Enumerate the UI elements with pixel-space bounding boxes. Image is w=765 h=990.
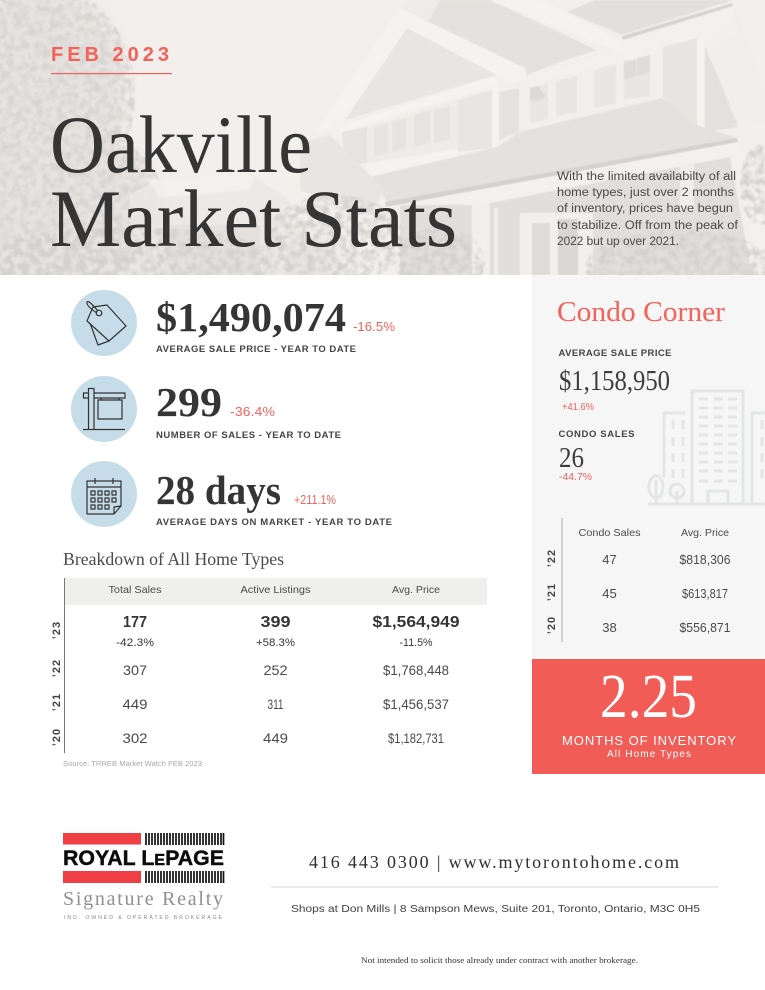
panel: months of inventory: All Home Types [607,749,691,760]
stat: number of sales: 299 [156,379,222,425]
condo history table: Condo Sales [578,527,640,539]
title: Oakville [50,99,312,190]
icon: calendar [71,461,137,527]
heading: breakdown: Breakdown of All Home Types [63,549,284,569]
condo history table: $613,817 [682,586,728,601]
year labels: ’20 [51,728,63,746]
condo average sale price: AVERAGE SALE PRICE [558,348,672,359]
row 2021: 449 [122,696,148,712]
row 2022: 307 [123,662,147,678]
condo sales: -44.7% [559,472,592,483]
icon: for sale sign [71,376,137,442]
table header row: Avg. Price [392,584,440,596]
row 2020 [122,730,444,746]
table header row: Total Sales [108,584,162,596]
heading: condo corner: Condo Corner [557,296,725,328]
year labels: ’22 [51,659,63,677]
condo history table: $818,306 [680,552,730,567]
panel: months of inventory: MONTHS OF INVENTORY [562,733,736,748]
row 2021: $1,456,537 [383,696,449,712]
intro text [557,171,739,248]
table header row [108,584,440,596]
contact line: 416 443 0300 | www.mytorontohome.com [309,852,679,872]
address: Shops at Don Mills | 8 Sampson Mews, Suite 201, Toronto, Ontario, M3C 0H5 [291,904,701,915]
condo sales: CONDO SALES [558,429,634,440]
condo average sale price: $1,158,950 [559,366,670,397]
stat: number of sales: NUMBER OF SALES - YEAR TO DATE [156,430,341,441]
year labels: ’23 [51,621,63,639]
row 2023: $1,564,949 [372,614,460,631]
stat: number of sales [71,376,341,442]
row 2020: 302 [122,730,148,746]
icon: price tags [71,290,137,356]
row 2023: 399 [260,614,291,631]
row 2023: +58.3% [256,637,295,649]
intro text: 2022 but up over 2021. [557,236,679,248]
condo history table: ’20 [546,616,558,634]
stat: days on market: 28 days [156,467,281,513]
intro text: home types, just over 2 months [557,187,734,199]
icon: city buildings [648,391,765,504]
condo history table: ’22 [546,549,558,567]
stat: average sale price: AVERAGE SALE PRICE - YEAR TO DATE [156,344,356,355]
panel: condo corner [532,275,765,659]
stat: average sale price [71,290,395,356]
condo history table: 38 [602,620,617,635]
panel: months of inventory: 2.25 [600,663,697,731]
condo history table: Avg. Price [681,527,729,539]
disclaimer: Not intended to solicit those already under contract with another brokerage. [361,955,638,965]
source note: Source: TRREB Market Watch FEB 2023 [63,759,202,768]
date label: FEB 2023 [51,44,169,66]
logo: royal lepage: ROYAL LEPAGE [63,847,224,870]
table: all home types [51,578,487,753]
condo sales: 26 [559,443,584,474]
condo history table [546,518,730,642]
condo average sale price [558,348,672,413]
row 2020: $1,182,731 [388,730,444,746]
condo history table: 47 [602,552,617,567]
row 2020: 449 [263,730,288,746]
row 2021 [122,696,449,712]
logo: royal lepage [63,833,224,921]
condo sales [558,429,634,483]
panel: months of inventory [532,659,765,774]
row 2021: 311 [268,696,284,712]
row 2023: 177 [123,614,147,631]
stat: days on market: +211.1% [294,492,336,507]
condo average sale price: +41.6% [562,402,594,413]
condo history table: $556,871 [680,620,730,635]
year labels [51,621,63,746]
row 2022 [123,662,449,678]
condo history table: 45 [602,586,617,601]
table header row: Active Listings [240,584,310,596]
intro text: of inventory, prices have begun [557,203,733,215]
logo: royal lepage: Signature Realty [63,888,223,910]
title: Market Stats [50,173,457,264]
row 2022: 252 [264,662,288,678]
intro text: to stabilize. Off from the peak of [557,220,739,232]
logo: royal lepage: IND. OWNED & OPERATED BROKERAGE [64,915,223,921]
stat: days on market: AVERAGE DAYS ON MARKET - YEAR TO DATE [156,517,392,528]
intro text: With the limited availabilty of all [557,171,736,183]
stat: number of sales: -36.4% [230,404,275,419]
condo history table: ’21 [546,583,558,601]
stat: average sale price: $1,490,074 [156,294,346,340]
title [50,99,457,264]
header photo: house background [0,0,765,275]
row 2023: -11.5% [400,637,433,649]
row 2023: -42.3% [116,637,154,649]
stat: average sale price: -16.5% [353,319,395,334]
year labels: ’21 [51,693,63,711]
row 2022: $1,768,448 [383,662,449,678]
stat: days on market [71,461,392,528]
row 2023 [116,614,460,649]
